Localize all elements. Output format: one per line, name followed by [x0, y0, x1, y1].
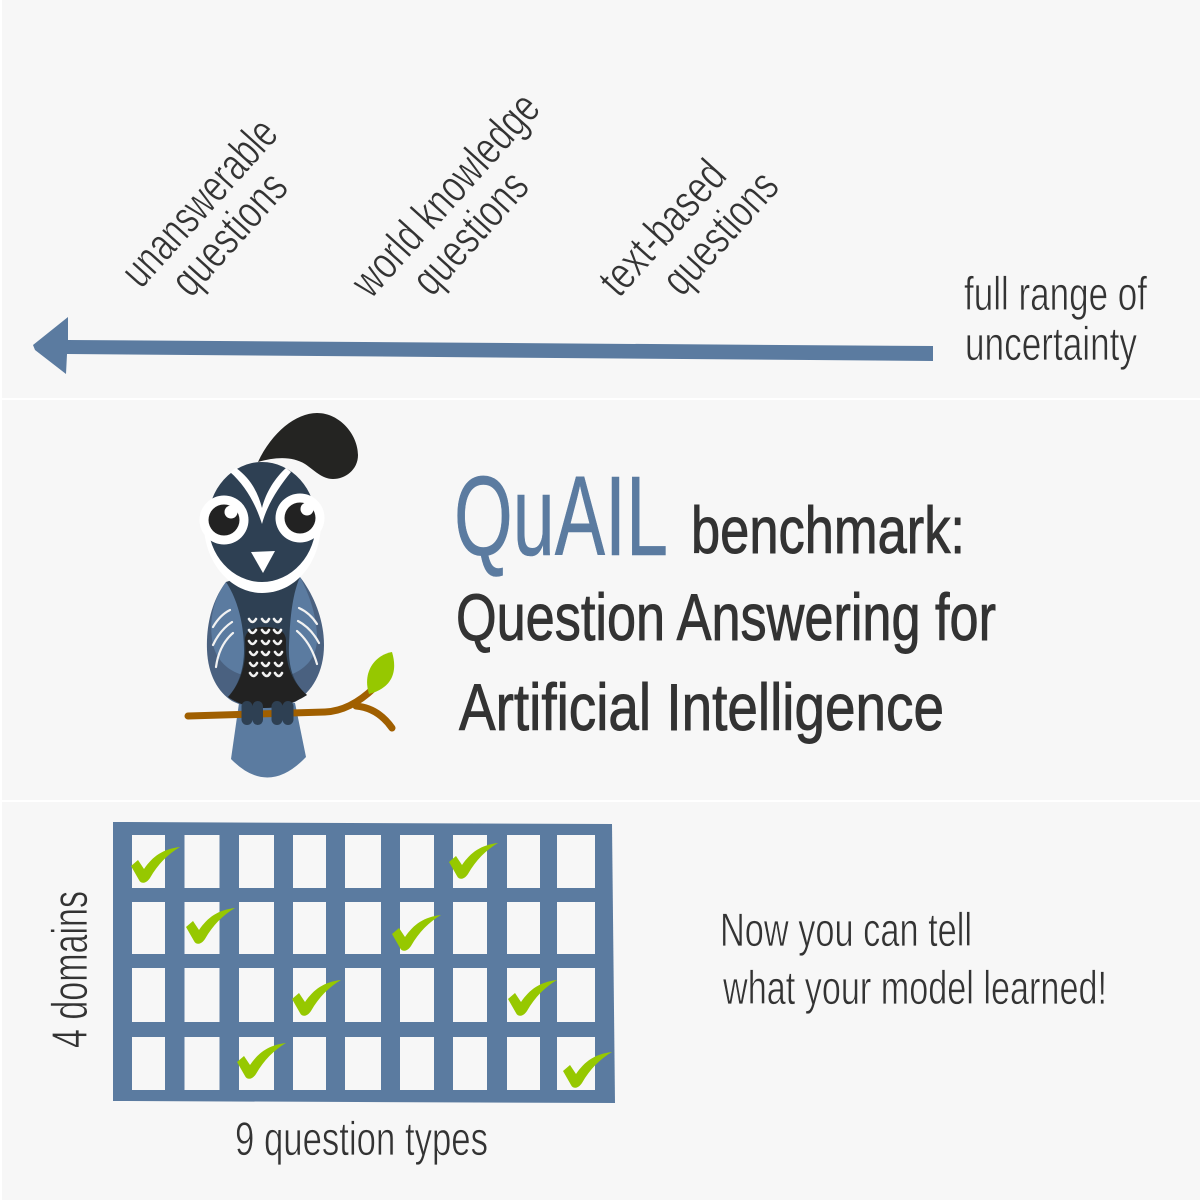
belly: [228, 627, 307, 708]
label: unanswerable questions: [110, 107, 297, 306]
wings: [211, 577, 317, 675]
title: QuAIL: [454, 453, 668, 579]
feet: [242, 701, 294, 725]
beak: [251, 551, 275, 573]
chest feathers: [249, 619, 282, 676]
callout text: [720, 903, 1107, 1014]
axis label: 4 domains: 4 domains: [42, 891, 98, 1048]
icon: quail mascot: [188, 413, 394, 778]
label: world knowledge questions: [339, 82, 550, 307]
chart: domains by question types grid: [113, 822, 615, 1103]
title: Question Answering for: [456, 580, 996, 654]
label: full range of uncertainty: uncertainty: [965, 317, 1137, 370]
label: world knowledge questions: questions: [401, 160, 538, 305]
body: [207, 577, 324, 708]
check marks: [131, 843, 612, 1088]
tail: [231, 703, 306, 778]
wing feathers: [213, 608, 319, 667]
label: text-based questions: questions: [651, 160, 788, 305]
title: Artificial Intelligence: [459, 670, 944, 744]
title: [454, 453, 996, 744]
brow: [230, 468, 291, 524]
label: text-based questions: text-based: [588, 149, 736, 306]
axis label: 9 question types: 9 question types: [235, 1112, 488, 1165]
title: benchmark:: [691, 493, 965, 567]
label: full range of uncertainty: [964, 267, 1148, 370]
label: world knowledge questions: world knowledge: [339, 82, 550, 307]
eyes: [200, 496, 248, 544]
chest: [226, 570, 307, 708]
branch: [188, 688, 392, 728]
label: unanswerable questions: unanswerable: [110, 107, 288, 297]
arrow: uncertainty direction: [33, 317, 933, 374]
crest: [258, 413, 358, 479]
callout text: Now you can tell: [720, 903, 972, 956]
label: unanswerable questions: questions: [160, 161, 297, 306]
head: [204, 510, 321, 593]
leaf: [367, 652, 394, 694]
